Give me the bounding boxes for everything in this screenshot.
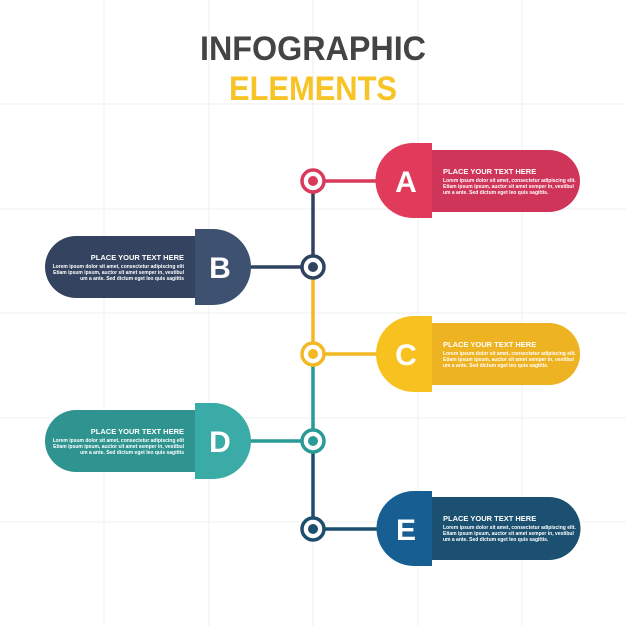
- item C: Lorem ipsum dolor sit amet, consectetur adipiscing elit.: [443, 351, 576, 357]
- item C: [302, 316, 580, 392]
- timeline spine: [311, 181, 315, 529]
- item C: PLACE YOUR TEXT HERE: [443, 340, 536, 349]
- item B: B: [209, 252, 231, 285]
- item D: Etiam ipsum ipsum, auctor sit amet semper in, vestibul: [53, 444, 185, 450]
- item B: PLACE YOUR TEXT HERE: [91, 253, 184, 262]
- item A: A: [395, 166, 417, 199]
- item D: D: [209, 426, 231, 459]
- item D: PLACE YOUR TEXT HERE: [91, 427, 184, 436]
- title: ELEMENTS: [229, 70, 397, 108]
- item A: Etiam ipsum ipsum, auctor sit amet semper in, vestibul: [443, 184, 574, 190]
- item B: Etiam ipsum ipsum, auctor sit amet semper in, vestibul: [53, 270, 185, 276]
- item E: Lorem ipsum dolor sit amet, consectetur adipiscing elit.: [443, 525, 576, 531]
- item C: Etiam ipsum ipsum, auctor sit amet semper in, vestibul: [443, 357, 574, 363]
- item A: PLACE YOUR TEXT HERE: [443, 167, 536, 176]
- item E: um a ante. Sed dictum eget leo quis sagittis.: [443, 537, 549, 543]
- item D: um a ante. Sed dictum eget leo quis sagittis: [80, 450, 184, 456]
- item D: Lorem ipsum dolor sit amet, consectetur adipiscing elit: [53, 438, 184, 444]
- item A: Lorem ipsum dolor sit amet, consectetur adipiscing elit.: [443, 178, 576, 184]
- item A: [302, 143, 580, 218]
- item B: um a ante. Sed dictum eget leo quis sagittis: [80, 276, 184, 282]
- item E: E: [396, 514, 416, 547]
- item D: [45, 403, 324, 479]
- title: INFOGRAPHIC: [200, 30, 426, 68]
- item E: Etiam ipsum ipsum, auctor sit amet semper in, vestibul: [443, 531, 574, 537]
- item B: Lorem ipsum dolor sit amet, consectetur adipiscing elit: [53, 264, 184, 270]
- title: [200, 30, 426, 108]
- item A: um a ante. Sed dictum eget leo quis sagittis.: [443, 190, 549, 196]
- item E: [302, 491, 580, 566]
- item B: [45, 229, 324, 305]
- item C: um a ante. Sed dictum eget leo quis sagittis.: [443, 363, 549, 369]
- item E: PLACE YOUR TEXT HERE: [443, 514, 536, 523]
- item C: C: [395, 339, 417, 372]
